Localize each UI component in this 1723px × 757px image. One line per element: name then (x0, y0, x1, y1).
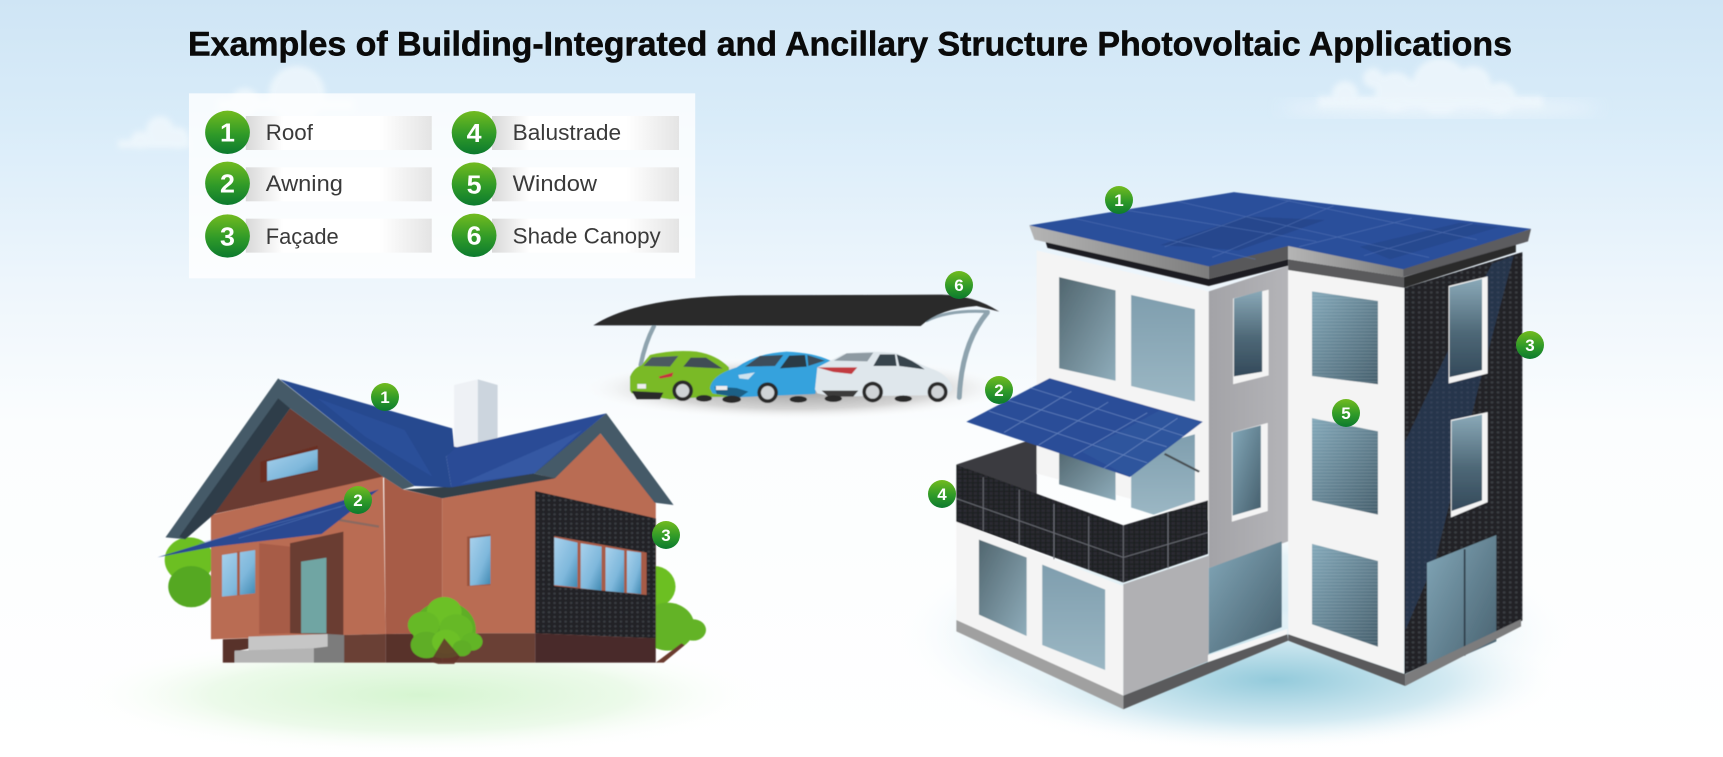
upper gable wall (214, 408, 384, 514)
column windows (1232, 290, 1269, 522)
carport with cars (580, 271, 1013, 420)
house roof fascia (165, 378, 674, 539)
balustrade solar panels (956, 465, 1208, 582)
legend item: 4 Balustrade: 4 (467, 118, 482, 148)
legend item: 1 Roof: Roof (266, 120, 314, 145)
house (158, 378, 706, 664)
clouds (118, 58, 1600, 149)
legend item: 2 Awning: Awning (266, 171, 343, 196)
white car (815, 352, 953, 402)
upper left windows (1059, 277, 1195, 401)
blue car (710, 352, 831, 403)
building badge 1 (1105, 186, 1133, 214)
white wall upper (1037, 250, 1209, 520)
house badge 3: 3 (661, 526, 671, 545)
building badge 3 (1516, 331, 1544, 359)
chimney (454, 379, 498, 447)
building badge 2: 2 (994, 381, 1004, 400)
legend item: 2 Awning (205, 162, 432, 205)
legend item: 3 Facade: Façade (266, 224, 339, 249)
badge 6: 6 (954, 276, 964, 295)
legend panel (189, 93, 695, 278)
legend item: 5 Window (452, 162, 679, 206)
ground glow: house (70, 635, 770, 755)
legend item: 4 Balustrade (452, 111, 679, 154)
building badge 2 (985, 376, 1013, 404)
front bush (408, 597, 483, 664)
building badge 3: 3 (1525, 336, 1535, 355)
main walls (211, 433, 656, 639)
legend item: 1 Roof: 1 (220, 118, 235, 148)
building solar roof (1029, 192, 1531, 269)
wing windows with blinds (1312, 291, 1378, 647)
grey column (1209, 266, 1288, 568)
house badge 3 (652, 521, 680, 549)
legend item: 3 Facade (205, 214, 432, 258)
white wing (1288, 270, 1404, 674)
title: Examples of Building-Integrated and Ancillary Structure Photovoltaic Applications (188, 26, 1512, 64)
green car (630, 351, 730, 402)
ground glow: building (985, 610, 1565, 750)
building badge 5 (1332, 399, 1360, 427)
building badge 5: 5 (1341, 404, 1351, 423)
building base (956, 619, 1521, 709)
house badge 2 (344, 486, 372, 514)
trees behind house (165, 537, 706, 663)
house solar roof (280, 379, 606, 487)
house badge 1: 1 (380, 388, 390, 407)
legend item: 6 Shade Canopy (452, 214, 679, 257)
canopy posts (641, 311, 988, 397)
foundation (223, 633, 656, 663)
legend item: 6 Shade Canopy: Shade Canopy (513, 224, 662, 248)
shade canopy solar panel (593, 295, 999, 326)
badge 6 (945, 271, 973, 299)
roof edge (1029, 225, 1531, 288)
carport artwork (580, 295, 1013, 420)
facade windows and door (1427, 276, 1496, 672)
house solar awning (158, 489, 379, 557)
facade solar panels on building (1404, 252, 1522, 674)
legend item: 1 Roof (205, 111, 432, 154)
legend item: 5 Window: Window (513, 171, 598, 196)
house badge 2: 2 (353, 491, 363, 510)
house artwork (158, 378, 706, 664)
legend item: 3 Facade: 3 (220, 222, 235, 251)
steps (235, 634, 344, 663)
building artwork (956, 192, 1531, 709)
car shadow (580, 357, 1013, 420)
legend item: 5 Window: 5 (467, 170, 482, 199)
ground glow: building haze (890, 520, 1580, 750)
legend item: 2 Awning: 2 (220, 169, 235, 199)
building badge 4 (928, 480, 956, 508)
legend item: 4 Balustrade: Balustrade (513, 120, 621, 145)
building solar awning (966, 378, 1203, 477)
porch and door (259, 532, 343, 635)
multi-storey building (928, 186, 1544, 709)
lower storey (956, 522, 1209, 697)
building badge 4: 4 (937, 485, 947, 504)
facade solar panels on house (535, 491, 656, 638)
balcony interior (956, 434, 1195, 515)
lobby glass (1208, 541, 1287, 662)
house badge 1 (371, 383, 399, 411)
legend item: 6 Shade Canopy: 6 (467, 221, 482, 251)
house windows (222, 446, 647, 597)
building badge 1: 1 (1114, 191, 1124, 210)
